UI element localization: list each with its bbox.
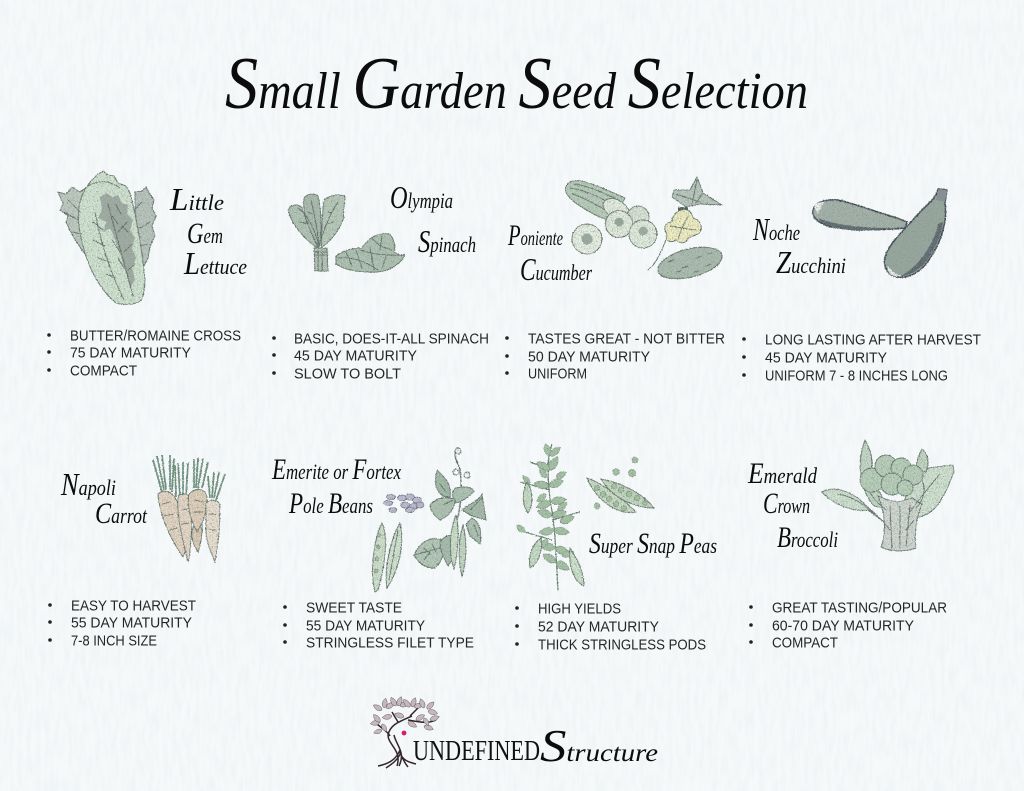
bullet list: BUTTER/ROMAINE CROSS bbox=[70, 328, 241, 344]
label: Emerald Crown Broccoli: Emerald bbox=[747, 457, 818, 490]
bullet list bbox=[272, 330, 489, 382]
label: Napoli Carrot: Carrot bbox=[95, 497, 148, 530]
bullet list: COMPACT bbox=[70, 362, 137, 380]
panel: olympia spinach bbox=[272, 179, 489, 382]
bullet list bbox=[283, 600, 474, 652]
bullet list bbox=[742, 332, 981, 384]
label: Emerite or Fortex Pole Beans bbox=[271, 453, 401, 520]
title: Small Garden Seed Selection bbox=[225, 43, 808, 125]
bullet list: SWEET TASTE bbox=[306, 600, 402, 616]
bullet list: 7-8 INCH SIZE bbox=[71, 632, 157, 650]
bullet list: COMPACT bbox=[772, 634, 838, 652]
bullet list: BASIC, DOES-IT-ALL SPINACH bbox=[294, 330, 489, 348]
icon: zucchini bbox=[813, 189, 947, 277]
bullet list: THICK STRINGLESS PODS bbox=[538, 636, 706, 654]
label: Little Gem Lettuce bbox=[169, 181, 247, 281]
bullet list bbox=[48, 598, 196, 650]
bullet list: UNIFORM 7 - 8 INCHES LONG bbox=[765, 368, 948, 384]
label: Emerald Crown Broccoli: Crown bbox=[763, 487, 810, 520]
icon: tree bbox=[370, 696, 440, 768]
label: Olympia Spinach bbox=[390, 179, 476, 259]
bullet list: 60-70 DAY MATURITY bbox=[772, 618, 914, 634]
panel: noche zucchini bbox=[742, 189, 981, 384]
label: Poniente Cucumber: Poniente bbox=[507, 219, 563, 252]
panel: napoli carrot bbox=[48, 455, 225, 650]
panel: poniente cucumber bbox=[505, 177, 725, 382]
bullet list: 55 DAY MATURITY bbox=[71, 614, 192, 632]
bullet list: GREAT TASTING/POPULAR bbox=[772, 600, 947, 616]
bullet list bbox=[505, 330, 725, 382]
label: Noche Zucchini: Noche bbox=[752, 211, 800, 247]
bullet list: 55 DAY MATURITY bbox=[306, 618, 425, 634]
label: Emerite or Fortex Pole Beans: Emerite or Fortex bbox=[271, 453, 401, 486]
label: Emerald Crown Broccoli bbox=[747, 457, 838, 554]
bullet list: TASTES GREAT - NOT BITTER bbox=[528, 330, 725, 348]
label: Little Gem Lettuce: Gem bbox=[187, 217, 223, 250]
wordmark: UNDEFINED bbox=[413, 735, 540, 767]
icon: broccoli bbox=[822, 440, 954, 551]
label: Noche Zucchini bbox=[752, 211, 846, 280]
logo: undefined structure bbox=[370, 696, 658, 771]
bullet list: EASY TO HARVEST bbox=[71, 598, 196, 614]
bullet list: SLOW TO BOLT bbox=[294, 366, 401, 382]
icon: cucumber bbox=[566, 177, 725, 285]
icon: beans and plant bbox=[373, 448, 486, 592]
icon: pea plant and pods bbox=[515, 443, 654, 590]
label: Little Gem Lettuce: Little bbox=[169, 181, 224, 217]
icon: pink dot bbox=[402, 731, 406, 735]
panel: emerite or fortex pole beans bbox=[271, 448, 486, 652]
bullet list bbox=[749, 600, 947, 652]
label: Emerald Crown Broccoli: Broccoli bbox=[777, 521, 838, 554]
bullet list: 45 DAY MATURITY bbox=[294, 348, 417, 364]
label: Little Gem Lettuce: Lettuce bbox=[183, 245, 247, 281]
label: Poniente Cucumber bbox=[507, 219, 592, 287]
label: Napoli Carrot: Napoli bbox=[60, 466, 116, 502]
bullet list bbox=[47, 328, 241, 380]
bullet list: LONG LASTING AFTER HARVEST bbox=[765, 332, 981, 348]
bullet list bbox=[515, 600, 706, 654]
label: Noche Zucchini: Zucchini bbox=[776, 244, 846, 280]
wordmark: Structure bbox=[540, 720, 658, 771]
icon: carrots bbox=[153, 455, 225, 562]
bullet list: STRINGLESS FILET TYPE bbox=[306, 634, 474, 652]
bullet list: UNIFORM bbox=[528, 366, 587, 382]
label: Napoli Carrot bbox=[60, 466, 148, 530]
bullet list: 75 DAY MATURITY bbox=[70, 344, 191, 362]
bullet list: HIGH YIELDS bbox=[538, 600, 621, 618]
icon: lettuce bbox=[58, 171, 156, 304]
panel: emerald crown broccoli bbox=[747, 440, 954, 652]
label: Poniente Cucumber: Cucumber bbox=[520, 251, 592, 287]
icon: spinach bbox=[288, 194, 405, 272]
panel: little gem lettuce bbox=[47, 171, 247, 380]
bullet list: 52 DAY MATURITY bbox=[538, 618, 659, 636]
label: Emerite or Fortex Pole Beans: Pole Beans bbox=[288, 487, 373, 520]
bullet list: 45 DAY MATURITY bbox=[765, 350, 887, 366]
label: Super Snap Peas: Super Snap Peas bbox=[589, 527, 717, 560]
label: Olympia Spinach: Olympia bbox=[390, 179, 453, 215]
label: Olympia Spinach: Spinach bbox=[418, 223, 476, 259]
panel: super snap peas bbox=[515, 443, 717, 654]
bullet list: 50 DAY MATURITY bbox=[528, 348, 650, 366]
wordmark bbox=[413, 720, 658, 771]
